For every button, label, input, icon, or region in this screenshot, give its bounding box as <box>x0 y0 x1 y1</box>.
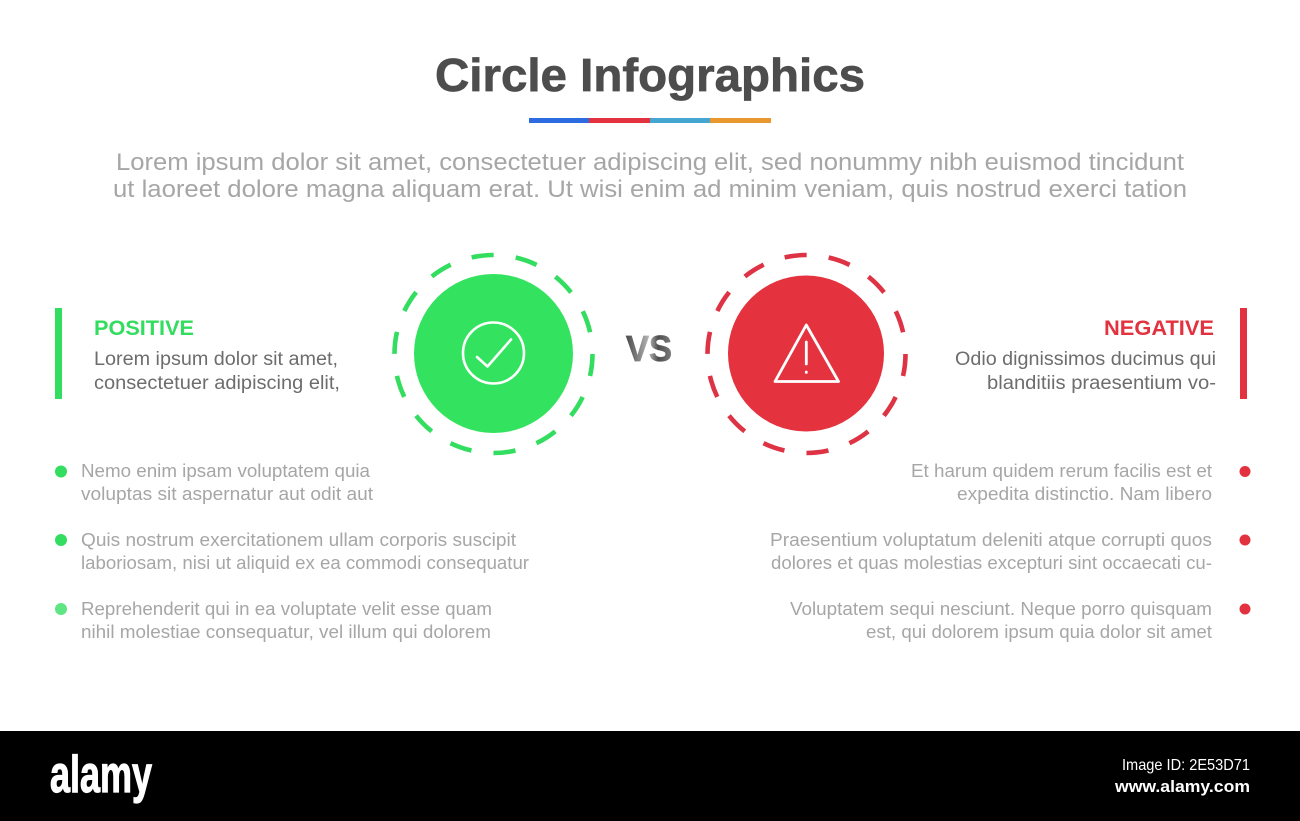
negative accent bar <box>1240 308 1247 399</box>
negative bullet 3: Voluptatem sequi nesciunt. Neque porro quisquam <box>790 599 1212 619</box>
negative bullet 2: dolores et quas molestias excepturi sint occaecati cu- <box>771 553 1212 573</box>
positive bullet 2: laboriosam, nisi ut aliquid ex ea commodi consequatur <box>81 553 529 573</box>
positive description <box>94 349 340 394</box>
title: Circle Infographics <box>435 49 865 101</box>
positive bullet 1: Nemo enim ipsam voluptatem quia <box>81 461 371 481</box>
positive bullet 3 <box>55 599 492 642</box>
negative bullet 1: expedita distinctio. Nam libero <box>957 484 1212 504</box>
negative bullet 2: Praesentium voluptatum deleniti atque corrupti quos <box>770 530 1212 550</box>
footer band <box>0 731 1300 821</box>
positive circle <box>394 255 592 453</box>
negative bullet 2 <box>770 530 1250 573</box>
negative heading: NEGATIVE <box>1104 317 1214 340</box>
filled disc <box>728 276 884 432</box>
VS label: VS <box>626 328 672 369</box>
website: www.alamy.com <box>1114 777 1250 796</box>
image id: Image ID: 2E53D71 <box>1122 757 1250 774</box>
negative bullet 3 <box>790 599 1250 642</box>
icon: check mark in circle <box>463 322 524 384</box>
negative bullet 1 <box>911 461 1250 504</box>
intro text: ut laoreet dolore magna aliquam erat. Ut wisi enim ad minim veniam, quis nostrud exerci tation <box>113 176 1187 203</box>
positive bullet 1 <box>55 461 373 504</box>
negative bullet 3: est, qui dolorem ipsum quia dolor sit amet <box>866 622 1212 642</box>
positive accent bar <box>55 308 62 399</box>
filled disc <box>414 274 573 433</box>
positive bullet 2: Quis nostrum exercitationem ullam corporis suscipit <box>81 530 516 550</box>
dashed ring <box>394 255 592 453</box>
dashed ring <box>708 255 906 453</box>
negative description: blanditiis praesentium vo- <box>987 373 1216 394</box>
panel: positive header <box>55 308 340 399</box>
negative bullet list <box>770 461 1250 642</box>
positive bullet 3: nihil molestiae consequatur, vel illum qui dolorem <box>81 622 491 642</box>
positive bullet 1: voluptas sit aspernatur aut odit aut <box>81 484 373 504</box>
negative description <box>955 349 1216 394</box>
icon: warning triangle <box>775 325 838 382</box>
intro text <box>113 149 1187 203</box>
positive heading: POSITIVE <box>94 317 194 340</box>
positive bullet list <box>55 461 529 642</box>
positive bullet 3: Reprehenderit qui in ea voluptate velit esse quam <box>81 599 492 619</box>
negative description: Odio dignissimos ducimus qui <box>955 349 1216 370</box>
positive description: Lorem ipsum dolor sit amet, <box>94 349 338 370</box>
black strip <box>0 731 1300 821</box>
negative bullet 1: Et harum quidem rerum facilis est et <box>911 461 1212 481</box>
intro text: Lorem ipsum dolor sit amet, consectetuer adipiscing elit, sed nonummy nibh euismod tincidunt <box>116 149 1184 176</box>
positive bullet 2 <box>55 530 529 573</box>
title underline: four colour segments <box>529 118 771 123</box>
panel: negative header <box>955 308 1247 399</box>
alamy logo wordmark: alamy <box>50 746 152 804</box>
positive description: consectetuer adipiscing elit, <box>94 373 340 394</box>
negative circle <box>708 255 906 453</box>
